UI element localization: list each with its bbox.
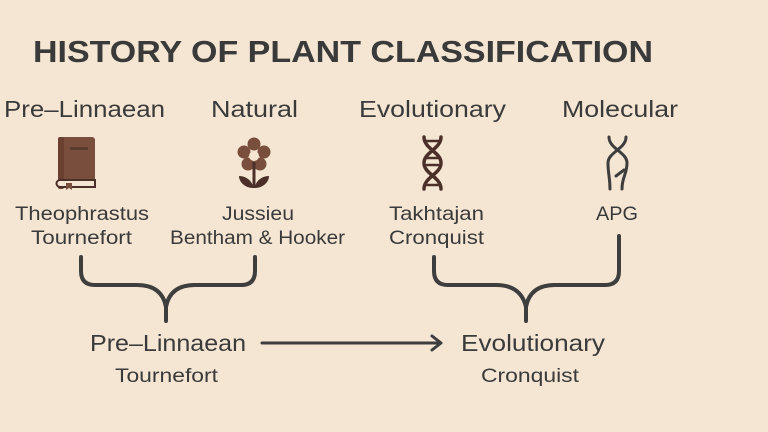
arrow — [262, 336, 441, 350]
heading: Pre-Linnaean: Pre–Linnaean — [4, 96, 165, 122]
bottom label: Pre-Linnaean Tournefort — [90, 330, 246, 387]
bottom label: Pre-Linnaean Tournefort: Tournefort — [115, 366, 219, 387]
names: Jussieu/Bentham & Hooker: Jussieu — [222, 204, 294, 225]
bracket right — [434, 236, 619, 321]
names: Jussieu/Bentham & Hooker: Bentham & Hooker — [170, 228, 346, 249]
names: APG: APG — [596, 204, 638, 225]
heading: Molecular: Molecular — [562, 96, 678, 122]
bottom label: Evolutionary Cronquist: Evolutionary — [461, 330, 606, 356]
heading: Natural: Natural — [211, 96, 298, 122]
heading: Evolutionary: Evolutionary — [359, 96, 507, 122]
bottom label: Evolutionary Cronquist — [461, 330, 606, 387]
icon: flower — [238, 138, 270, 188]
names: Theophrastus/Tournefort: Tournefort — [31, 228, 133, 249]
icon: DNA — [424, 137, 441, 189]
title: HISTORY OF PLANT CLASSIFICATION — [33, 34, 653, 69]
bracket left — [81, 257, 255, 321]
icon: molecular strand — [608, 137, 627, 189]
names: Takhtajan/Cronquist — [389, 204, 485, 249]
icon: book — [57, 137, 95, 190]
names: Theophrastus/Tournefort: Theophrastus — [15, 204, 149, 225]
names: Takhtajan/Cronquist: Takhtajan — [389, 204, 484, 225]
names: Takhtajan/Cronquist: Cronquist — [389, 228, 485, 249]
names: Jussieu/Bentham & Hooker — [170, 204, 346, 249]
bottom label: Pre-Linnaean Tournefort: Pre–Linnaean — [90, 330, 246, 356]
bottom label: Evolutionary Cronquist: Cronquist — [481, 366, 580, 387]
names: Theophrastus/Tournefort — [15, 204, 149, 249]
